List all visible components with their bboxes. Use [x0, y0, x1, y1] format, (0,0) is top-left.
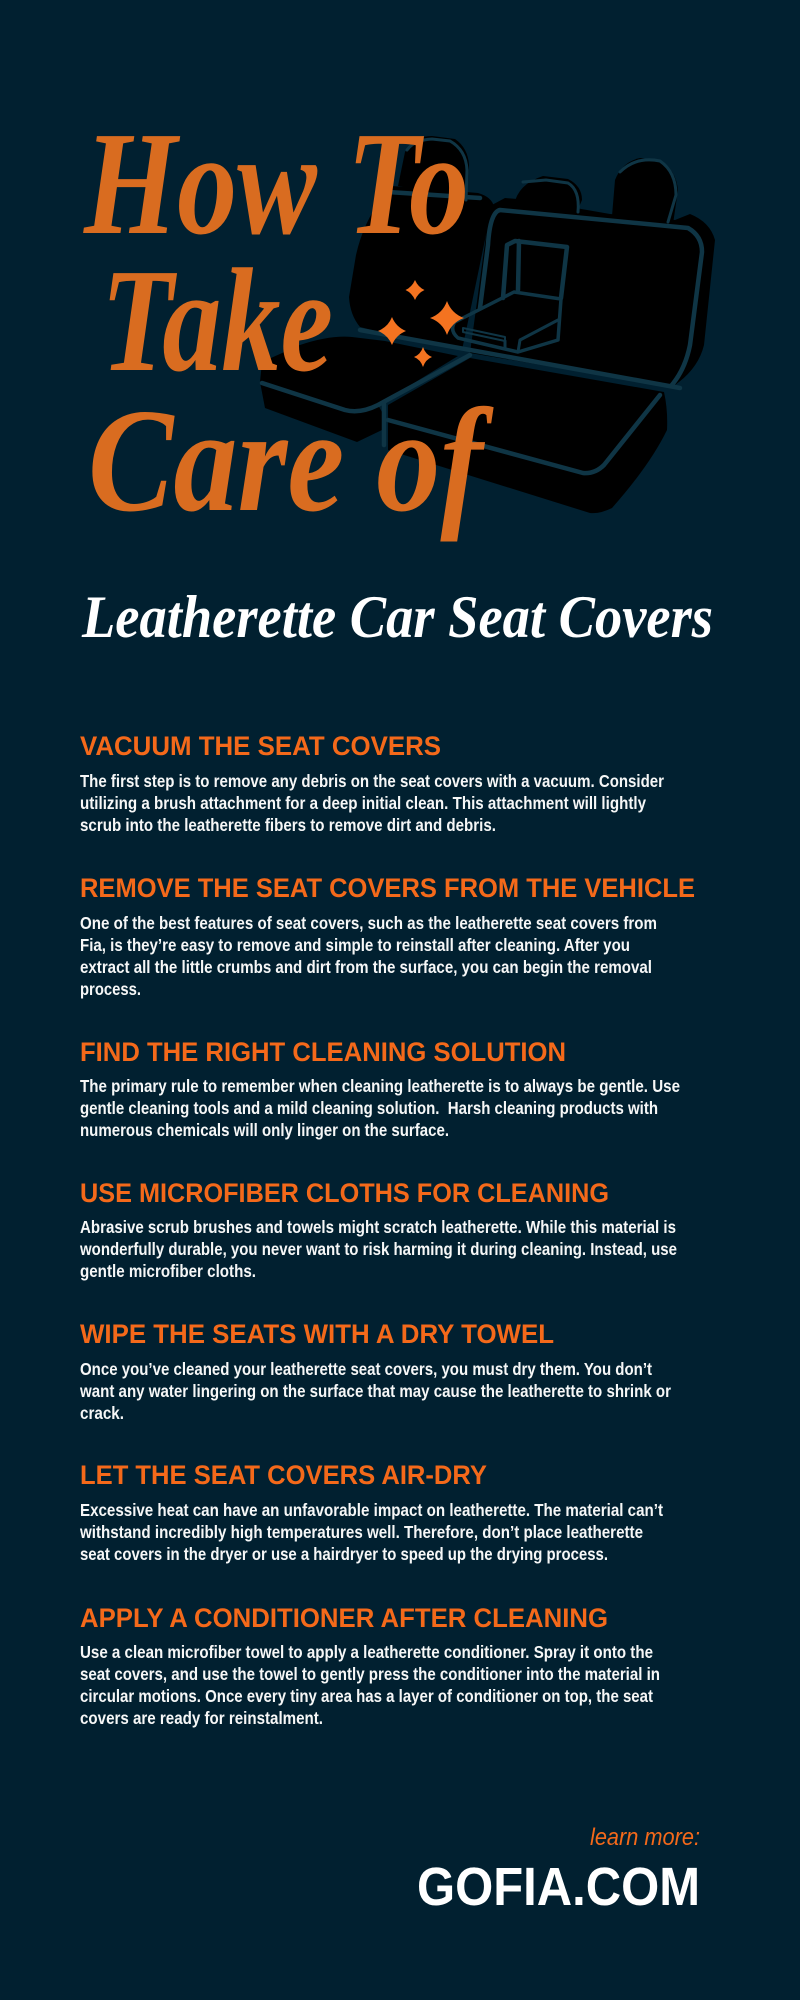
section: use microfiber cloths: [79, 1178, 677, 1281]
section: find the right cleaning solution: [80, 1037, 680, 1140]
title line: Care of: Care of: [88, 379, 494, 543]
body text: gentle cleaning tools and a mild cleaning solution. Harsh cleaning products with: [80, 1098, 658, 1118]
body text: seat covers in the dryer or use a hairdryer to speed up the drying process.: [80, 1544, 608, 1564]
heading: REMOVE THE SEAT COVERS FROM THE VEHICLE: [80, 873, 695, 903]
body text: utilizing a brush attachment for a deep initial clean. This attachment will lightly: [80, 793, 646, 813]
section: wipe the seats: [79, 1319, 671, 1423]
icon: sparkles: [378, 280, 464, 367]
body text: Fia, is they’re easy to remove and simple to reinstall after cleaning. After you: [80, 935, 630, 955]
body text: Abrasive scrub brushes and towels might scratch leatherette. While this material is: [80, 1217, 676, 1237]
right backrest rim: [470, 198, 715, 387]
body text: [80, 913, 657, 999]
body text: withstand incredibly high temperatures well. Therefore, don’t place leatherette: [79, 1522, 643, 1542]
heading: WIPE THE SEATS WITH A DRY TOWEL: [80, 1319, 554, 1349]
section: apply a conditioner: [80, 1603, 660, 1728]
body text: [80, 771, 664, 835]
body text: One of the best features of seat covers, such as the leatherette seat covers from: [80, 913, 657, 933]
sparkle medium: [378, 317, 406, 345]
title: [82, 102, 494, 543]
right seat cushion: [388, 358, 667, 513]
heading: FIND THE RIGHT CLEANING SOLUTION: [80, 1037, 566, 1067]
left backrest: [349, 186, 494, 350]
title line: How To: How To: [82, 102, 469, 266]
body text: [79, 1500, 663, 1564]
body text: The primary rule to remember when cleaning leatherette is to always be gentle. Use: [80, 1076, 680, 1096]
body text: Use a clean microfiber towel to apply a leatherette conditioner. Spray it onto the: [80, 1642, 653, 1662]
body text: [80, 1076, 680, 1140]
body text: Excessive heat can have an unfavorable impact on leatherette. The material can’t: [80, 1500, 663, 1520]
sparkle small bottom: [414, 347, 432, 367]
footer: website: GOFIA.COM: [417, 1857, 700, 1917]
heading: LET THE SEAT COVERS AIR-DRY: [80, 1460, 487, 1490]
section: remove the seat covers: [80, 873, 695, 999]
body text: process.: [80, 979, 141, 999]
left headrest: [398, 136, 469, 200]
body text: extract all the little crumbs and dirt from the surface, you can begin the removal: [80, 957, 652, 977]
body text: crack.: [80, 1403, 124, 1423]
section: let the seat covers air-dry: [79, 1460, 663, 1564]
right headrest: [612, 158, 678, 224]
section: vacuum the seat covers: [80, 731, 664, 835]
footer: learn more: learn more:: [590, 1824, 700, 1851]
illustration: car seat covers: [260, 136, 715, 513]
body text: seat covers, and use the towel to gently press the conditioner into the material in: [80, 1664, 660, 1684]
heading: APPLY A CONDITIONER AFTER CLEANING: [80, 1603, 608, 1633]
body text: [80, 1642, 660, 1728]
body text: covers are ready for reinstalment.: [80, 1708, 323, 1728]
body text: scrub into the leatherette fibers to remove dirt and debris.: [80, 815, 496, 835]
body text: Once you’ve cleaned your leatherette seat covers, you must dry them. You don’t: [80, 1359, 652, 1379]
centre headrest: [514, 176, 582, 214]
body text: want any water lingering on the surface that may cause the leatherette to shrink or: [79, 1381, 671, 1401]
body text: gentle microfiber cloths.: [80, 1261, 256, 1281]
body text: circular motions. Once every tiny area has a layer of conditioner on top, the seat: [80, 1686, 653, 1706]
heading: USE MICROFIBER CLOTHS FOR CLEANING: [80, 1178, 609, 1208]
body text: [79, 1217, 677, 1281]
body text: The first step is to remove any debris on the seat covers with a vacuum. Consider: [80, 771, 664, 791]
body text: numerous chemicals will only linger on the surface.: [80, 1120, 449, 1140]
sparkle small top: [406, 280, 424, 300]
title line: Take: Take: [101, 239, 333, 403]
heading: VACUUM THE SEAT COVERS: [80, 731, 441, 761]
body text: wonderfully durable, you never want to risk harming it during cleaning. Instead, use: [79, 1239, 677, 1259]
seat seam lines: [262, 139, 702, 473]
subtitle: Leatherette Car Seat Covers: [81, 584, 713, 650]
body text: [79, 1359, 671, 1423]
sparkle large: [430, 301, 464, 335]
left seat cushion: [260, 337, 458, 442]
